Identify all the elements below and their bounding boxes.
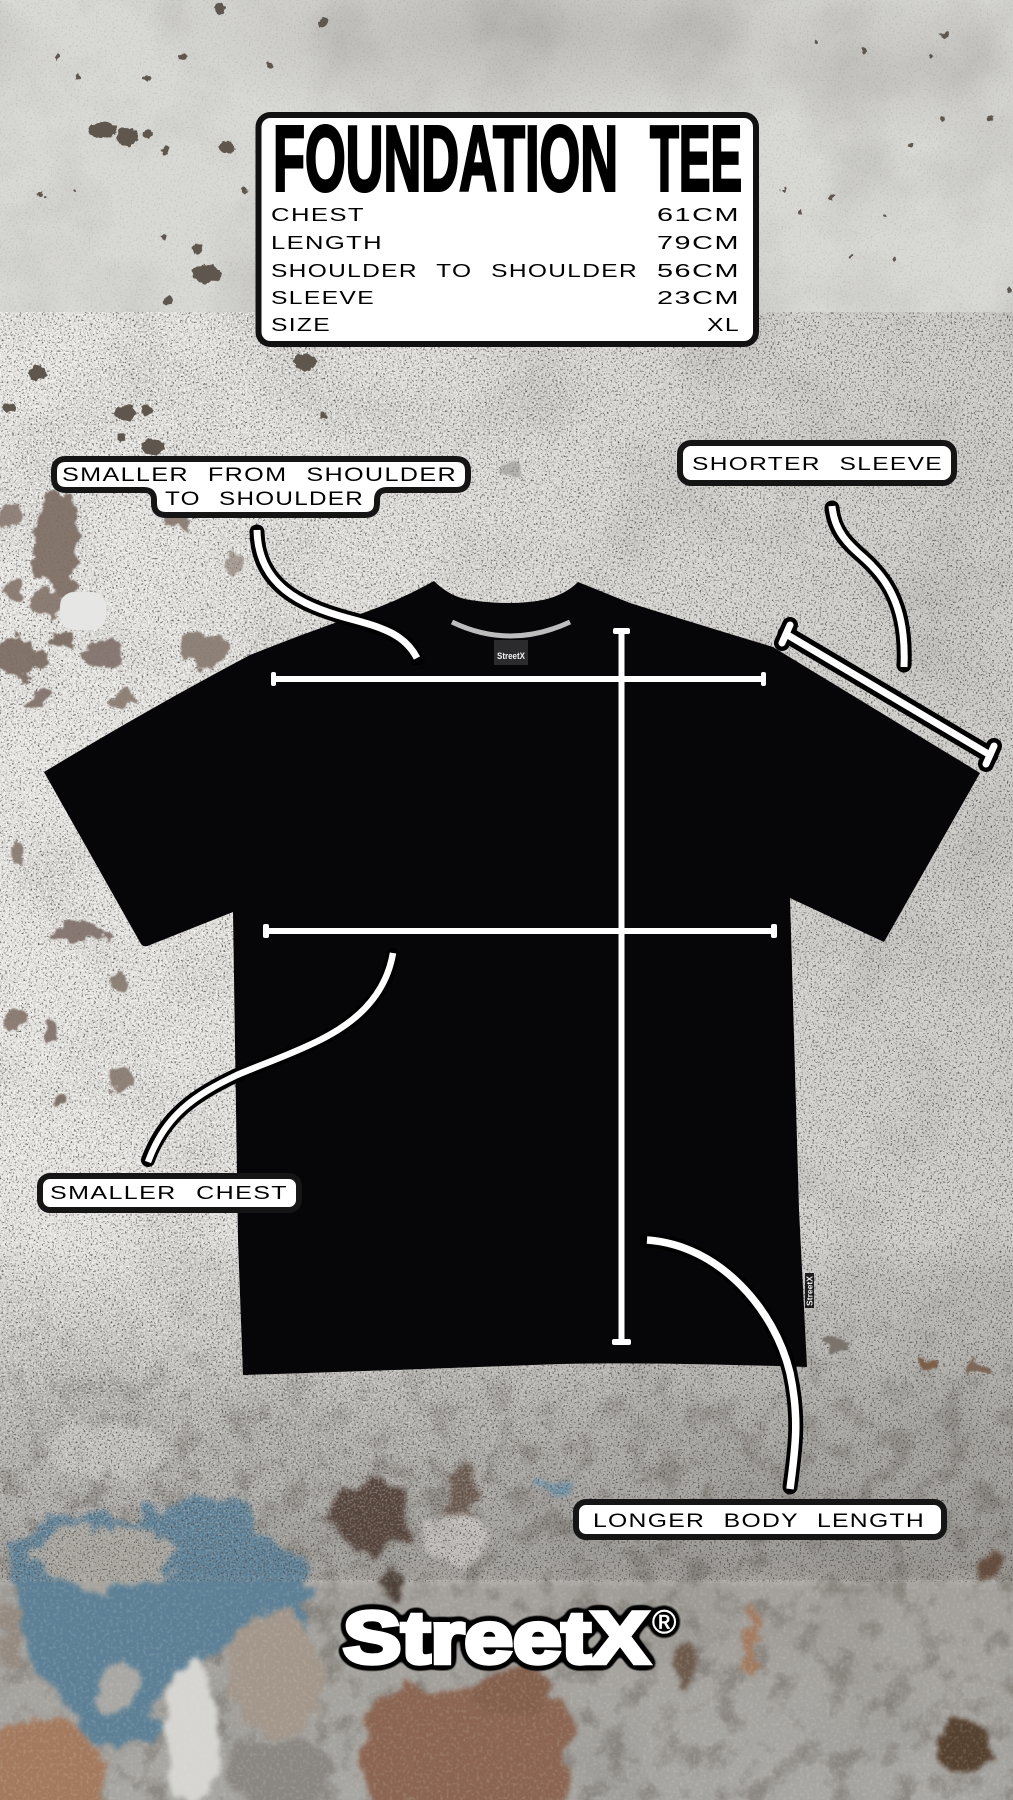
measure line: sleeve xyxy=(782,625,994,764)
measurement rows: LENGTH xyxy=(271,232,383,253)
callout: smaller from shoulder to shoulder: SMALLER FROM SHOULDER xyxy=(62,465,457,486)
measurement rows xyxy=(271,204,740,335)
callout: shorter sleeve xyxy=(680,443,954,483)
measurement rows: SHOULDER TO SHOULDER xyxy=(271,260,638,281)
callout: smaller chest xyxy=(40,1176,299,1210)
measurement rows: SIZE xyxy=(271,314,331,335)
callout: longer body length: LONGER BODY LENGTH xyxy=(593,1511,925,1532)
neck label: StreetX xyxy=(497,651,525,661)
logo: StreetX: ® xyxy=(652,1603,676,1640)
measurement rows: SLEEVE xyxy=(271,287,375,308)
measurement rows: XL xyxy=(707,314,740,335)
measure line: chest xyxy=(263,924,777,938)
t-shirt xyxy=(44,581,980,1375)
hem tag: StreetX xyxy=(806,1275,814,1306)
callout: longer body length xyxy=(576,1502,944,1537)
panel: size chart xyxy=(258,106,756,344)
measurement rows: 56CM xyxy=(657,260,740,281)
background stains: rust and paint, lower wall xyxy=(0,1420,999,1800)
measure line: shoulder to shoulder xyxy=(271,672,766,686)
measurement rows: CHEST xyxy=(271,204,365,225)
arrow: sleeve callout curve xyxy=(832,506,904,667)
shirt body xyxy=(44,581,980,1375)
callout: smaller from shoulder to shoulder: TO SHOULDER xyxy=(165,489,364,510)
collar tape xyxy=(452,622,570,636)
arrow: shoulder callout curve xyxy=(257,530,417,658)
neck label xyxy=(494,640,528,665)
title: TEE xyxy=(650,106,742,210)
measure line: body length xyxy=(612,628,631,1345)
logo: StreetX: StreetX xyxy=(343,1598,649,1679)
measurement rows: 79CM xyxy=(657,232,740,253)
arrow: body length callout curve xyxy=(647,1240,796,1489)
measurement rows: 23CM xyxy=(657,287,740,308)
arrow: chest callout curve xyxy=(148,953,393,1162)
background stains: rust on left wall xyxy=(0,464,995,1375)
callout: smaller from shoulder to shoulder xyxy=(54,459,468,515)
background dots: top slab pits xyxy=(4,3,1013,455)
callout: smaller chest: SMALLER CHEST xyxy=(50,1183,288,1203)
title: FOUNDATION xyxy=(273,106,618,210)
measurement rows: 61CM xyxy=(657,204,740,225)
callout: shorter sleeve: SHORTER SLEEVE xyxy=(692,453,943,474)
